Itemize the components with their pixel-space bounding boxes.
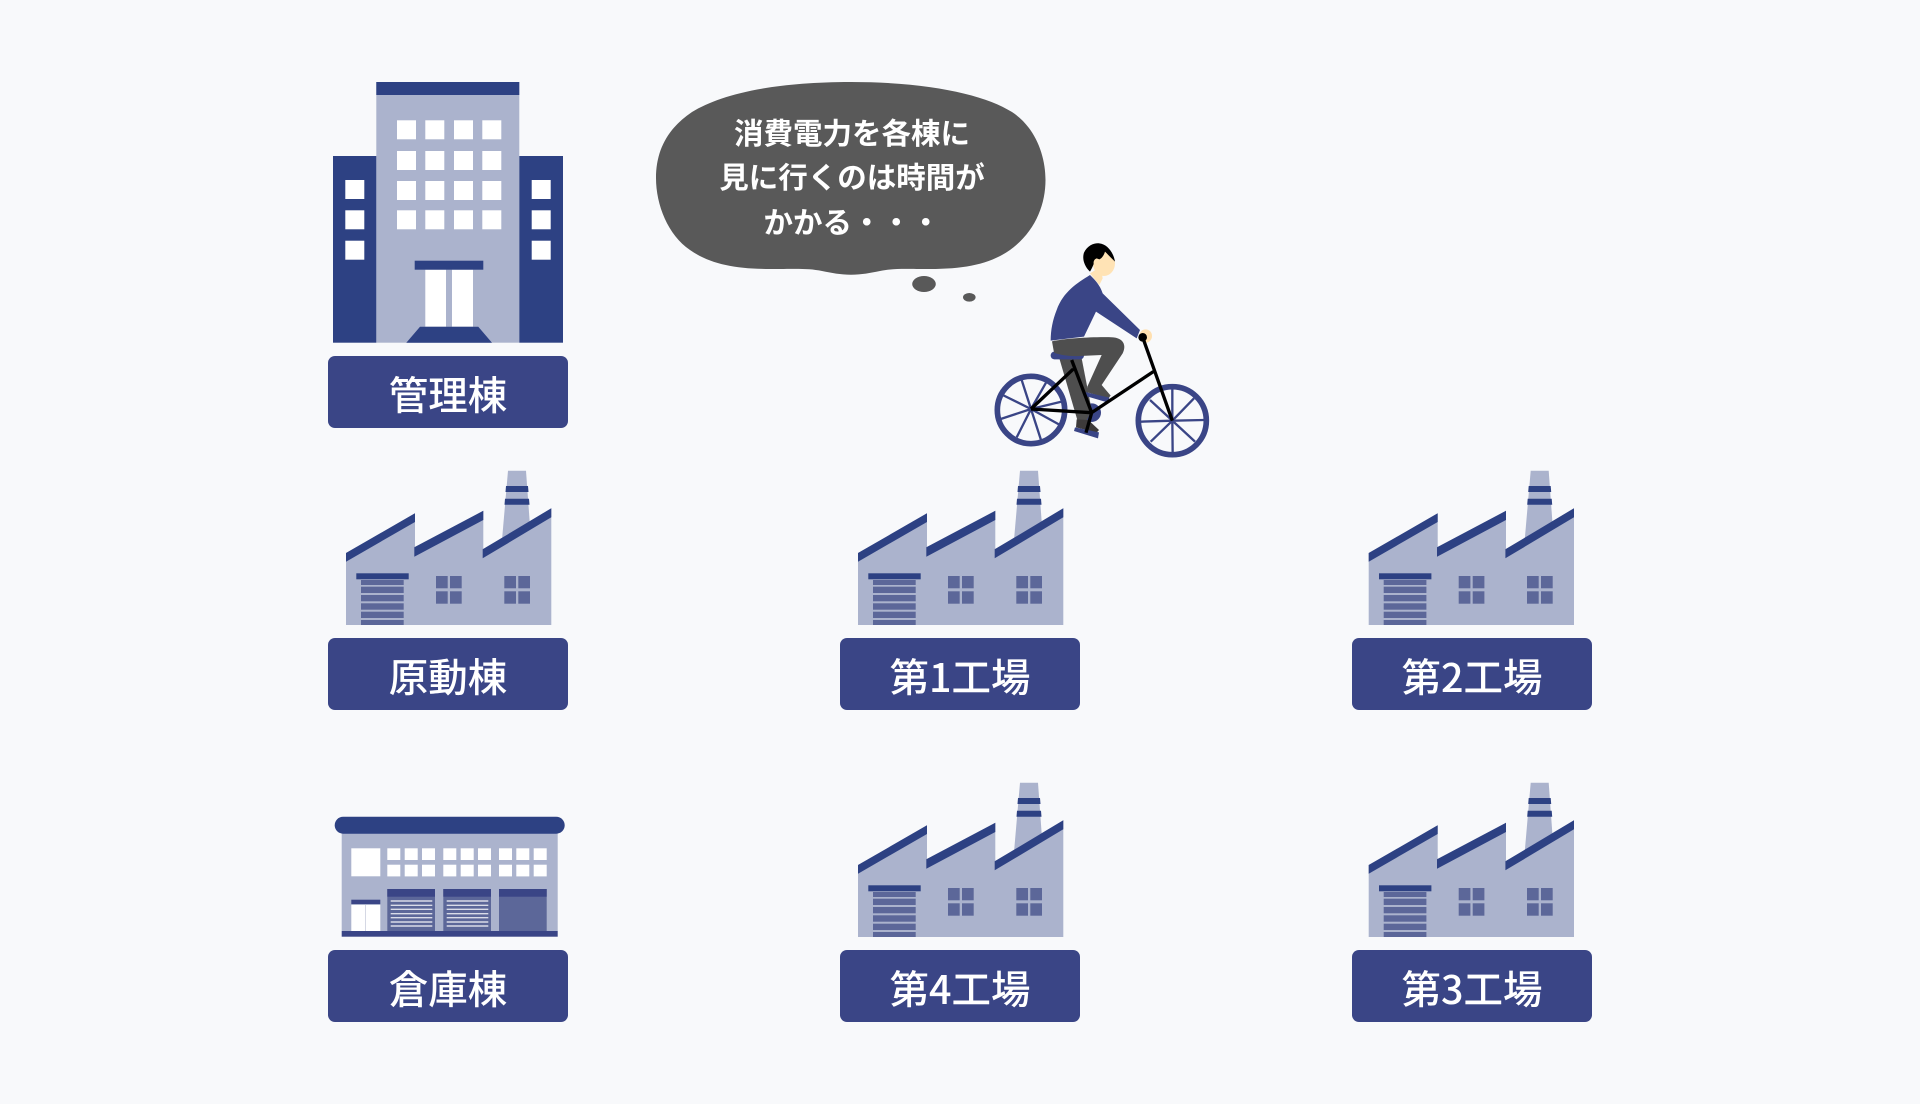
front leg (1052, 337, 1124, 398)
icon: factory 第1工場 (858, 471, 1063, 625)
bubble text: 見に行くのは時間が (719, 155, 985, 197)
label: 第2工場: 第2工場 (1401, 647, 1543, 704)
bubble text (719, 111, 985, 242)
head (1083, 243, 1115, 285)
icon: factory 原動棟 (346, 471, 551, 625)
sweater (1051, 275, 1140, 341)
label: 管理棟 (328, 356, 568, 428)
label: 第3工場 (1352, 950, 1592, 1022)
icon: factory 第3工場 (1369, 783, 1574, 937)
label: 第3工場: 第3工場 (1401, 959, 1543, 1016)
label: 倉庫棟 (328, 950, 568, 1022)
bicycle frame (1031, 335, 1172, 433)
label: 倉庫棟: 倉庫棟 (389, 959, 507, 1016)
label: 管理棟: 管理棟 (389, 365, 507, 422)
icon: administration building (333, 82, 563, 343)
icon: person riding bicycle (997, 243, 1206, 455)
icon: warehouse (335, 817, 565, 937)
label: 原動棟 (328, 638, 568, 710)
back leg and shoe (1059, 358, 1099, 438)
label: 第1工場: 第1工場 (889, 647, 1031, 704)
hand (1139, 329, 1152, 343)
saddle (1051, 352, 1084, 359)
icon: factory 第4工場 (858, 783, 1063, 937)
chainring (1082, 403, 1101, 422)
rear wheel (997, 376, 1065, 444)
speech bubble (656, 82, 1046, 302)
bubble text: 消費電力を各棟に (734, 111, 970, 153)
label: 第4工場: 第4工場 (889, 959, 1031, 1016)
icon: factory 第2工場 (1369, 471, 1574, 625)
front wheel (1138, 387, 1206, 455)
bubble text: かかる・・・ (763, 200, 941, 242)
front pedal (1084, 392, 1109, 403)
label: 第2工場 (1352, 638, 1592, 710)
label: 第4工場 (840, 950, 1080, 1022)
label: 原動棟: 原動棟 (389, 647, 507, 704)
label: 第1工場 (840, 638, 1080, 710)
